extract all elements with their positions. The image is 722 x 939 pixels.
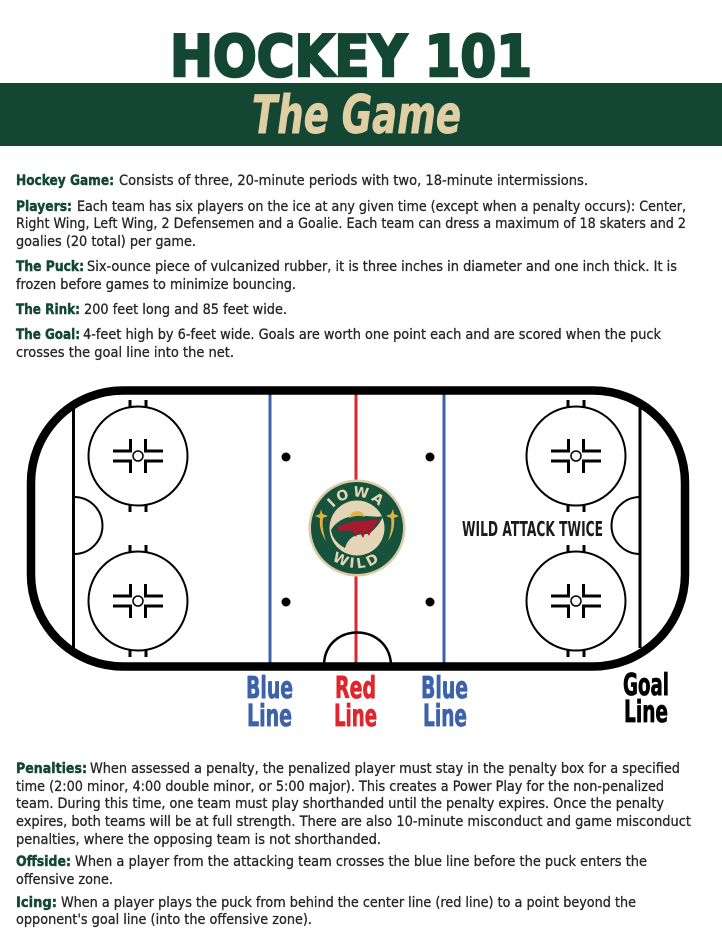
- rule: icing: [16, 895, 636, 928]
- label: goal line: [623, 668, 669, 730]
- logo: wild animal head: [331, 511, 383, 548]
- rule: icing: When a player plays the puck from behind the center line (red line) to a point beyond the: [61, 895, 636, 911]
- label: red line: Line: [334, 699, 377, 734]
- logo: stars: [315, 509, 399, 541]
- fact: the goal: 4-feet high by 6-feet wide. Goals are worth one point each and are scored when the puck: [83, 327, 662, 343]
- fact: the puck: [16, 259, 677, 293]
- goal creases: [74, 497, 640, 554]
- faceoff circle bottom left: [88, 545, 188, 657]
- goal line right: [638, 408, 642, 648]
- fact: the puck: frozen before games to minimize bouncing.: [16, 277, 296, 293]
- fact: the puck: The Puck:: [16, 259, 84, 275]
- fact: the rink: The Rink:: [16, 302, 80, 318]
- fact: the goal: The Goal:: [16, 327, 80, 343]
- rule: offside: When a player from the attacking team crosses the blue line before the puck enters the: [75, 854, 647, 870]
- rule: offside: Offside:: [16, 854, 71, 870]
- label: blue line left: Blue: [246, 671, 293, 706]
- faceoff circle top left: [88, 400, 188, 512]
- label: blue line right: Line: [423, 699, 467, 734]
- blue line left: [268, 392, 272, 664]
- text block: rules: [16, 761, 691, 928]
- rule: offside: [16, 854, 647, 888]
- fact: players: Players:: [16, 199, 72, 215]
- annotation: wild attack twice: WILD ATTACK TWICE: [462, 517, 603, 541]
- label: goal line: Goal: [623, 668, 669, 703]
- label: blue line left: [246, 671, 293, 734]
- logo: WILD: WILD: [334, 551, 378, 568]
- rink boards outline: [31, 390, 685, 666]
- label: red line: Red: [335, 671, 376, 706]
- logo: IOWA: IOWA: [326, 486, 382, 508]
- rule: penalties: penalties, where the opposing team is not shorthanded.: [16, 832, 381, 848]
- banner: The Game: [0, 83, 722, 146]
- rule: offside: offensive zone.: [16, 872, 113, 888]
- text block: game facts: [16, 173, 686, 361]
- faceoff circle top right: [526, 400, 626, 512]
- rule: penalties: Penalties:: [16, 761, 87, 777]
- fact: the rink: 200 feet long and 85 feet wide.: [84, 302, 287, 318]
- fact: players: [16, 199, 686, 250]
- neutral zone dots: [282, 452, 434, 606]
- red center line: [354, 392, 358, 664]
- label: goal line: Line: [624, 695, 668, 730]
- banner: The Game: The Game: [252, 85, 461, 146]
- goal line left: [72, 408, 75, 648]
- rule: icing: Icing:: [16, 895, 57, 911]
- blue line right: [442, 392, 446, 664]
- rule: penalties: [16, 761, 691, 848]
- fact: the rink: [16, 302, 287, 318]
- label: blue line right: [421, 671, 468, 734]
- rule: icing: opponent's goal line (into the offensive zone).: [16, 912, 312, 928]
- fact: hockey game: Hockey Game:: [16, 173, 114, 189]
- title: HOCKEY 101: [170, 24, 532, 90]
- label: red line: [334, 671, 377, 734]
- fact: the goal: [16, 327, 662, 361]
- faceoff circle bottom right: [526, 545, 626, 657]
- rink diagram: [26, 386, 690, 671]
- fact: the goal: crosses the goal line into the net.: [16, 345, 234, 361]
- fact: players: goalies (20 total) per game.: [16, 234, 196, 250]
- center ice logo: [308, 480, 406, 576]
- label: blue line left: Line: [247, 699, 292, 734]
- referee crease: [324, 632, 391, 664]
- label: blue line right: Blue: [421, 671, 468, 706]
- fact: hockey game: Consists of three, 20-minute periods with two, 18-minute intermissions.: [119, 173, 588, 189]
